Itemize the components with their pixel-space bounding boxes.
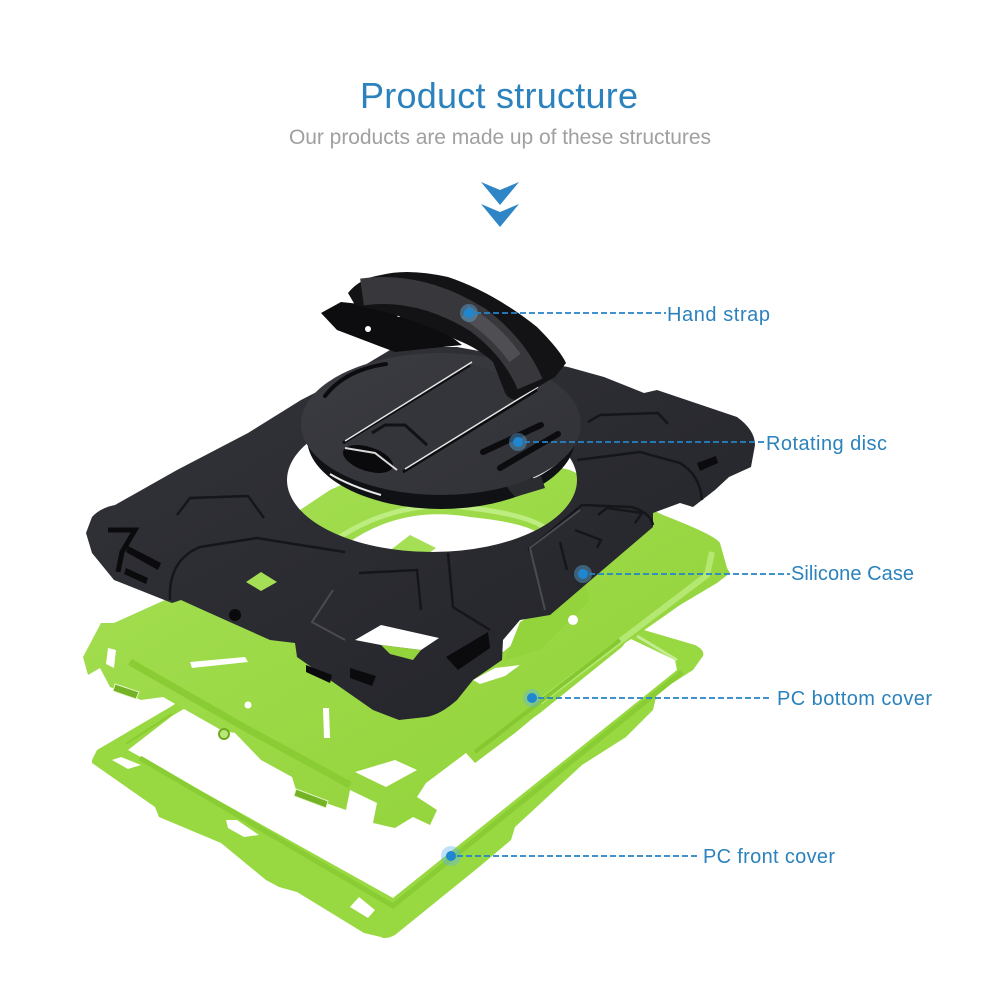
disc slots [483, 425, 558, 468]
title: Product structure [360, 75, 638, 116]
hand strap part [321, 272, 566, 400]
callout: Hand strap [460, 304, 770, 326]
disc metal bracket [341, 363, 537, 470]
callout: PC bottom cover: PC bottom cover [777, 688, 932, 710]
callout: Rotating disc [509, 433, 887, 455]
callout: PC bottom cover [523, 688, 932, 710]
callout: Silicone Case: Silicone Case [791, 563, 914, 585]
case ridges [170, 413, 702, 630]
callout: PC front cover: PC front cover [703, 846, 835, 868]
icon: double down arrow [481, 182, 519, 227]
case cutouts [246, 572, 277, 591]
callout: PC front cover [441, 846, 835, 868]
subtitle: Our products are made up of these structures [289, 126, 711, 149]
callout: Rotating disc: Rotating disc [766, 433, 887, 455]
silicone case part [86, 347, 755, 720]
rotating disc part [301, 353, 581, 509]
callout: Hand strap: Hand strap [667, 304, 770, 326]
PC front cover part [92, 620, 703, 938]
speaker and port details [108, 530, 135, 572]
circular hole in bottom cover [345, 514, 555, 652]
PC bottom cover part [83, 440, 730, 828]
callout: Silicone Case [574, 563, 914, 585]
